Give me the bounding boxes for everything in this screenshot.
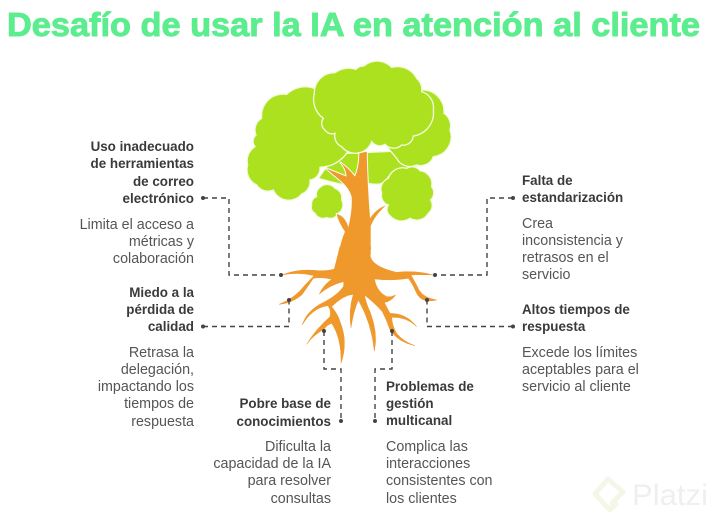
text block: Altos <box>522 302 639 395</box>
text block: Pobre base: capacidad de la IA <box>213 456 331 472</box>
text block: Problemas: Complica las <box>386 439 468 455</box>
text block: Altos: respuesta <box>522 319 586 334</box>
connector: Falta <box>433 196 515 277</box>
connector: Altos <box>425 298 515 328</box>
text block: Falta: Falta de <box>522 173 573 188</box>
text block: Miedo: Miedo a la <box>129 285 195 300</box>
canopy: back middle <box>318 150 420 184</box>
text block: Miedo: delegación, <box>121 362 194 378</box>
text block: Uso inadecuado: Limita el acceso a <box>80 217 194 233</box>
text block: Falta: Crea <box>522 216 553 232</box>
text block: Miedo: respuesta <box>131 414 194 430</box>
text block: Uso inadecuado: de herramientas <box>91 156 194 171</box>
canopy layers <box>247 61 451 221</box>
text block: Pobre base: consultas <box>271 491 331 507</box>
text block: Problemas: Problemas de <box>386 379 474 394</box>
text block: Pobre base: Dificulta la <box>265 439 331 455</box>
text block: Uso inadecuado <box>80 139 195 267</box>
text block: Pobre base: Pobre base de <box>239 396 331 411</box>
text block: Altos: Altos tiempos de <box>522 302 630 317</box>
text block: Pobre base <box>213 396 331 507</box>
text block: Pobre base: para resolver <box>248 473 331 489</box>
watermark: Platzi logo <box>595 479 708 512</box>
text block: Miedo: tiempos de <box>124 396 194 412</box>
text block: Pobre base: conocimientos <box>236 414 331 429</box>
text block: Falta: servicio <box>522 267 571 283</box>
connector: Miedo <box>201 298 291 328</box>
text block: Miedo <box>98 285 195 430</box>
text block: Altos: servicio al cliente <box>522 379 631 395</box>
connector: Problemas <box>373 329 394 423</box>
trunk and roots <box>279 247 437 363</box>
canopy: top <box>314 61 434 153</box>
text block: Uso inadecuado: electrónico <box>123 191 194 206</box>
text block: Falta <box>522 173 624 283</box>
text block: Miedo: Retrasa la <box>129 345 194 361</box>
text block: Miedo: pérdida de <box>126 302 194 317</box>
canopy: back left <box>247 87 353 200</box>
canopy: small left <box>311 184 343 218</box>
text block: Uso inadecuado: métricas y <box>129 234 195 250</box>
watermark: Platzi logo: Platzi <box>632 479 708 512</box>
text block: Altos: aceptables para el <box>522 362 639 378</box>
connector: Uso inadecuado <box>201 196 283 277</box>
text block: Problemas: consistentes con <box>386 473 493 489</box>
text block: Problemas: interacciones <box>386 456 470 472</box>
text block: Altos: Excede los límites <box>522 345 637 361</box>
canopy: small right <box>381 167 434 221</box>
trunk upper <box>326 152 386 255</box>
text block: Falta: retrasos en el <box>522 250 609 266</box>
text block: Problemas: los clientes <box>386 491 457 507</box>
text block: Uso inadecuado: colaboración <box>113 251 194 267</box>
text block: Uso inadecuado: de correo <box>133 174 194 189</box>
text block: Problemas: gestión <box>386 396 434 411</box>
text block: Falta: estandarización <box>522 190 623 205</box>
canopy: back right <box>385 90 451 167</box>
text block: Miedo: impactando los <box>98 379 194 395</box>
text block: Uso inadecuado: Uso inadecuado <box>91 139 194 154</box>
text block: Miedo: calidad <box>148 319 194 334</box>
text block: Falta: inconsistencia y <box>522 233 624 249</box>
title: Desafío de usar la IA en atención al cliente <box>7 6 700 43</box>
text block: Problemas: multicanal <box>386 413 452 428</box>
illustration: tree <box>247 61 451 363</box>
connector: Pobre base <box>322 329 343 423</box>
text block: Problemas <box>386 379 493 507</box>
